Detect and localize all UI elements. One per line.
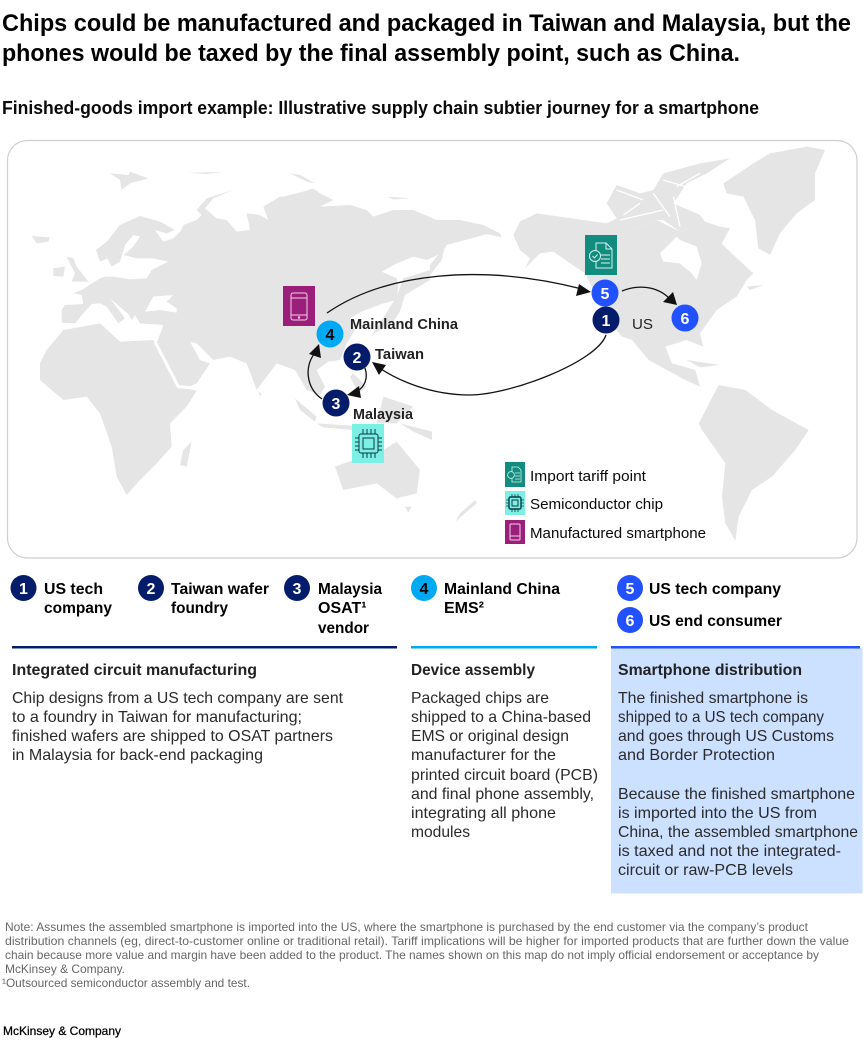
panel: smartphone distribution: is imported into the US from bbox=[618, 805, 817, 822]
key: step 4: 4 bbox=[420, 581, 429, 598]
arrow: US tech company to end consumer bbox=[622, 287, 677, 305]
arrow: Malaysia to Mainland China bbox=[308, 344, 322, 399]
legend item: semiconductor chip: Semiconductor chip bbox=[530, 496, 663, 513]
panel: device assembly: printed circuit board (PCB) bbox=[411, 767, 598, 784]
world map bbox=[32, 147, 825, 541]
panel: smartphone distribution: The finished smartphone is bbox=[618, 690, 808, 707]
map label: Taiwan: Taiwan bbox=[375, 347, 424, 363]
key: step 2 bbox=[138, 575, 269, 617]
panel: smartphone distribution: and Border Protection bbox=[618, 747, 775, 764]
key: step 1: US tech bbox=[44, 581, 103, 598]
panel: map frame bbox=[8, 140, 857, 558]
icon: smartphone bbox=[283, 286, 315, 326]
footnote: Note: Assumes the assembled smartphone is imported into the US, where the smartphone is purchased by the end customer via the company’s product bbox=[5, 920, 809, 934]
key: step 2: Taiwan wafer bbox=[171, 581, 269, 598]
panel: device assembly: and final phone assembly, bbox=[411, 786, 594, 803]
map marker 3: 3 bbox=[332, 396, 341, 413]
panel: integrated circuit manufacturing: Chip designs from a US tech company are sent bbox=[12, 690, 344, 707]
map marker 2: 2 bbox=[353, 350, 362, 367]
legend item: semiconductor chip bbox=[505, 491, 663, 515]
map marker 2 bbox=[344, 344, 370, 370]
map label: US: US bbox=[632, 316, 653, 333]
panel: integrated circuit manufacturing: Integrated circuit manufacturing bbox=[12, 662, 257, 679]
arrow: US tech company to Taiwan foundry bbox=[372, 335, 606, 395]
subtitle: Finished-goods import example: Illustrative supply chain subtier journey for a smartphone bbox=[2, 98, 759, 118]
map marker 5: 5 bbox=[601, 286, 610, 303]
panel: smartphone distribution: shipped to a US tech company bbox=[618, 709, 824, 726]
arrow: Mainland China to US bbox=[327, 275, 591, 313]
panel: integrated circuit manufacturing: to a foundry in Taiwan for manufacturing; bbox=[12, 709, 302, 726]
map marker 5 bbox=[592, 280, 618, 306]
footnote: chain because more value and margin have been added to the product. The names shown on this map do not imply official endorsement or acceptance by bbox=[5, 948, 819, 962]
panel: smartphone distribution: circuit or raw-PCB levels bbox=[618, 862, 793, 879]
map marker 6 bbox=[672, 304, 698, 332]
panel: device assembly: manufacturer for the bbox=[411, 747, 556, 764]
key: step 4: EMS² bbox=[444, 600, 484, 617]
legend item: manufactured smartphone: Manufactured smartphone bbox=[530, 525, 706, 542]
key: step 3: 3 bbox=[293, 581, 302, 598]
panel: device assembly: Packaged chips are bbox=[411, 690, 549, 707]
key: step 2: foundry bbox=[171, 600, 228, 617]
footnote bbox=[2, 920, 849, 990]
panel: smartphone distribution: and goes through US Customs bbox=[618, 728, 834, 745]
key: step 6: 6 bbox=[626, 613, 635, 630]
key: step 1 bbox=[10, 575, 112, 617]
key: step 6 bbox=[617, 607, 782, 633]
icon: tariff document bbox=[585, 235, 617, 275]
panel: smartphone distribution: China, the assembled smartphone bbox=[618, 824, 858, 841]
key: step 3: OSAT¹ bbox=[318, 600, 367, 617]
key: step 3: vendor bbox=[318, 620, 369, 637]
map marker 1 bbox=[592, 306, 620, 334]
footnote: ¹Outsourced semiconductor assembly and test. bbox=[2, 976, 250, 990]
panel: integrated circuit manufacturing bbox=[12, 646, 397, 764]
key: step 4 bbox=[411, 575, 560, 617]
legend item: import tariff point bbox=[505, 462, 647, 487]
map marker 3 bbox=[322, 390, 350, 416]
icon: semiconductor chip bbox=[352, 424, 384, 463]
key: step 4: Mainland China bbox=[444, 581, 560, 598]
panel: smartphone distribution: is taxed and not the integrated- bbox=[618, 843, 841, 860]
title: Chips could be manufactured and packaged in Taiwan and Malaysia, but the bbox=[2, 10, 851, 37]
key: step 5 bbox=[617, 575, 781, 601]
map label: Malaysia: Malaysia bbox=[353, 407, 414, 423]
legend bbox=[505, 462, 706, 544]
key: step 1: 1 bbox=[19, 581, 28, 598]
legend item: manufactured smartphone bbox=[505, 520, 706, 544]
arrow: Taiwan foundry to Malaysia bbox=[347, 368, 366, 398]
footnote: distribution channels (eg, direct-to-customer online or traditional retail). Tariff implications will be higher for imported products that are further down the value bbox=[5, 934, 849, 948]
panel: device assembly: modules bbox=[411, 824, 470, 841]
footnote: McKinsey & Company. bbox=[5, 962, 125, 976]
panel: device assembly: shipped to a China-based bbox=[411, 709, 591, 726]
panel: integrated circuit manufacturing: finished wafers are shipped to OSAT partners bbox=[12, 728, 333, 745]
key: step 3: Malaysia bbox=[318, 581, 382, 598]
key: step 5: US tech company bbox=[649, 581, 781, 598]
key: step 6: US end consumer bbox=[649, 613, 782, 630]
title: phones would be taxed by the final assembly point, such as China. bbox=[2, 40, 740, 67]
panel: device assembly: Device assembly bbox=[411, 662, 535, 679]
panel: device assembly: EMS or original design bbox=[411, 728, 569, 745]
legend item: import tariff point: Import tariff point bbox=[530, 468, 647, 485]
source logo: McKinsey & Company bbox=[3, 1024, 121, 1038]
map marker 1: 1 bbox=[602, 313, 611, 330]
panel: integrated circuit manufacturing: in Malaysia for back-end packaging bbox=[12, 747, 263, 764]
panel: smartphone distribution bbox=[611, 646, 862, 894]
map marker 4 bbox=[316, 320, 344, 348]
key: step 2: 2 bbox=[147, 581, 156, 598]
key: step 5: 5 bbox=[626, 581, 635, 598]
key: step 3 bbox=[284, 575, 382, 637]
map marker 4: 4 bbox=[326, 327, 335, 344]
title bbox=[2, 10, 851, 67]
panel: smartphone distribution: Because the finished smartphone bbox=[618, 786, 855, 803]
panel: device assembly bbox=[411, 646, 598, 841]
map marker 6: 6 bbox=[681, 311, 690, 328]
panel: device assembly: integrating all phone bbox=[411, 805, 556, 822]
map label: Mainland China: Mainland China bbox=[350, 317, 459, 333]
panel: smartphone distribution: Smartphone distribution bbox=[618, 662, 802, 679]
key: step 1: company bbox=[44, 600, 112, 617]
